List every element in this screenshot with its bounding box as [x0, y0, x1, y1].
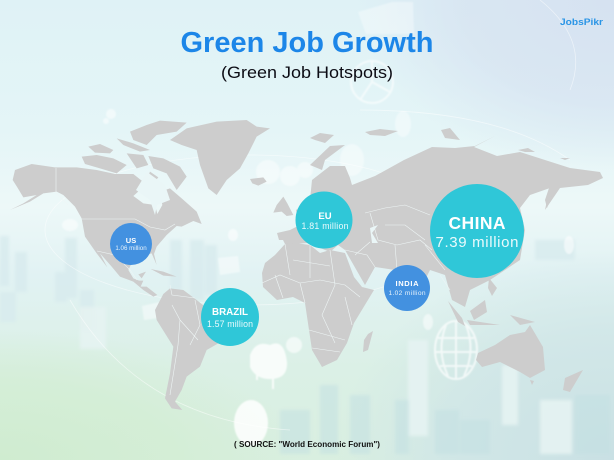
bubble: Brazil: 1.57 million: [207, 319, 253, 329]
icon: location pin: [228, 229, 574, 254]
icon: trees upper middle: [256, 160, 313, 186]
icon: gear lower: [286, 337, 302, 353]
icon: leaf globe bottom: [234, 400, 268, 446]
map: Caribbean: [151, 269, 177, 277]
world map: [10, 120, 603, 410]
bubble: China: 7.39 million: [436, 234, 518, 251]
map: Svalbard, Novaya Zemlya: [310, 128, 460, 170]
title: Green Job Growth: [180, 27, 434, 59]
subtitle: (Green Job Hotspots): [221, 64, 393, 82]
icon: wheel top: [351, 61, 393, 103]
source note: ( SOURCE: "World Economic Forum"): [234, 440, 380, 449]
map: Tasmania, New Zealand: [530, 370, 583, 392]
map: Madagascar: [363, 331, 373, 352]
icon: leaf small: [62, 219, 433, 330]
icon: trees lower: [250, 343, 287, 389]
bubble: China: [430, 184, 524, 278]
map: Australia: [476, 325, 545, 378]
bubble: India: [384, 265, 430, 311]
bubble: EU: 1.81 million: [302, 221, 349, 231]
map: Africa: [262, 243, 374, 367]
bubble: India: 1.02 million: [388, 290, 426, 297]
bubble: Brazil: BRAZIL: [212, 307, 248, 318]
icon: leaf globe right: [435, 321, 477, 379]
icon: globe leaf upper: [340, 111, 411, 176]
map: South America: [155, 288, 221, 410]
map: Iceland: [250, 177, 267, 186]
map: Greenland: [170, 120, 270, 195]
map: Indonesia, Philippines, Japan: [448, 185, 552, 326]
map: inland water: [136, 172, 378, 243]
icon: gears left: [103, 109, 116, 124]
map: country borders: [56, 168, 450, 395]
bubble: EU: [296, 192, 352, 248]
bubble: EU: EU: [318, 211, 332, 222]
bubble: India: INDIA: [396, 279, 419, 288]
map: UK and Ireland: [273, 197, 293, 216]
bubble: Brazil: [201, 288, 259, 346]
logo: JobsPikr: JobsPikr: [560, 17, 604, 27]
icon: building top: [358, 2, 414, 34]
map: Americas, Greenland: [10, 120, 293, 410]
bubble: China: CHINA: [448, 213, 506, 233]
map: North America: [10, 164, 202, 297]
map: Far-east islands: [518, 148, 570, 160]
bubble: US: 1.06 million: [115, 245, 147, 252]
icon: solar panels: [142, 256, 240, 320]
bubble: US: [110, 223, 152, 265]
map: Arctic islands: [130, 121, 187, 145]
bubble: US: US: [126, 236, 136, 245]
map: Eurasia: [277, 136, 603, 307]
